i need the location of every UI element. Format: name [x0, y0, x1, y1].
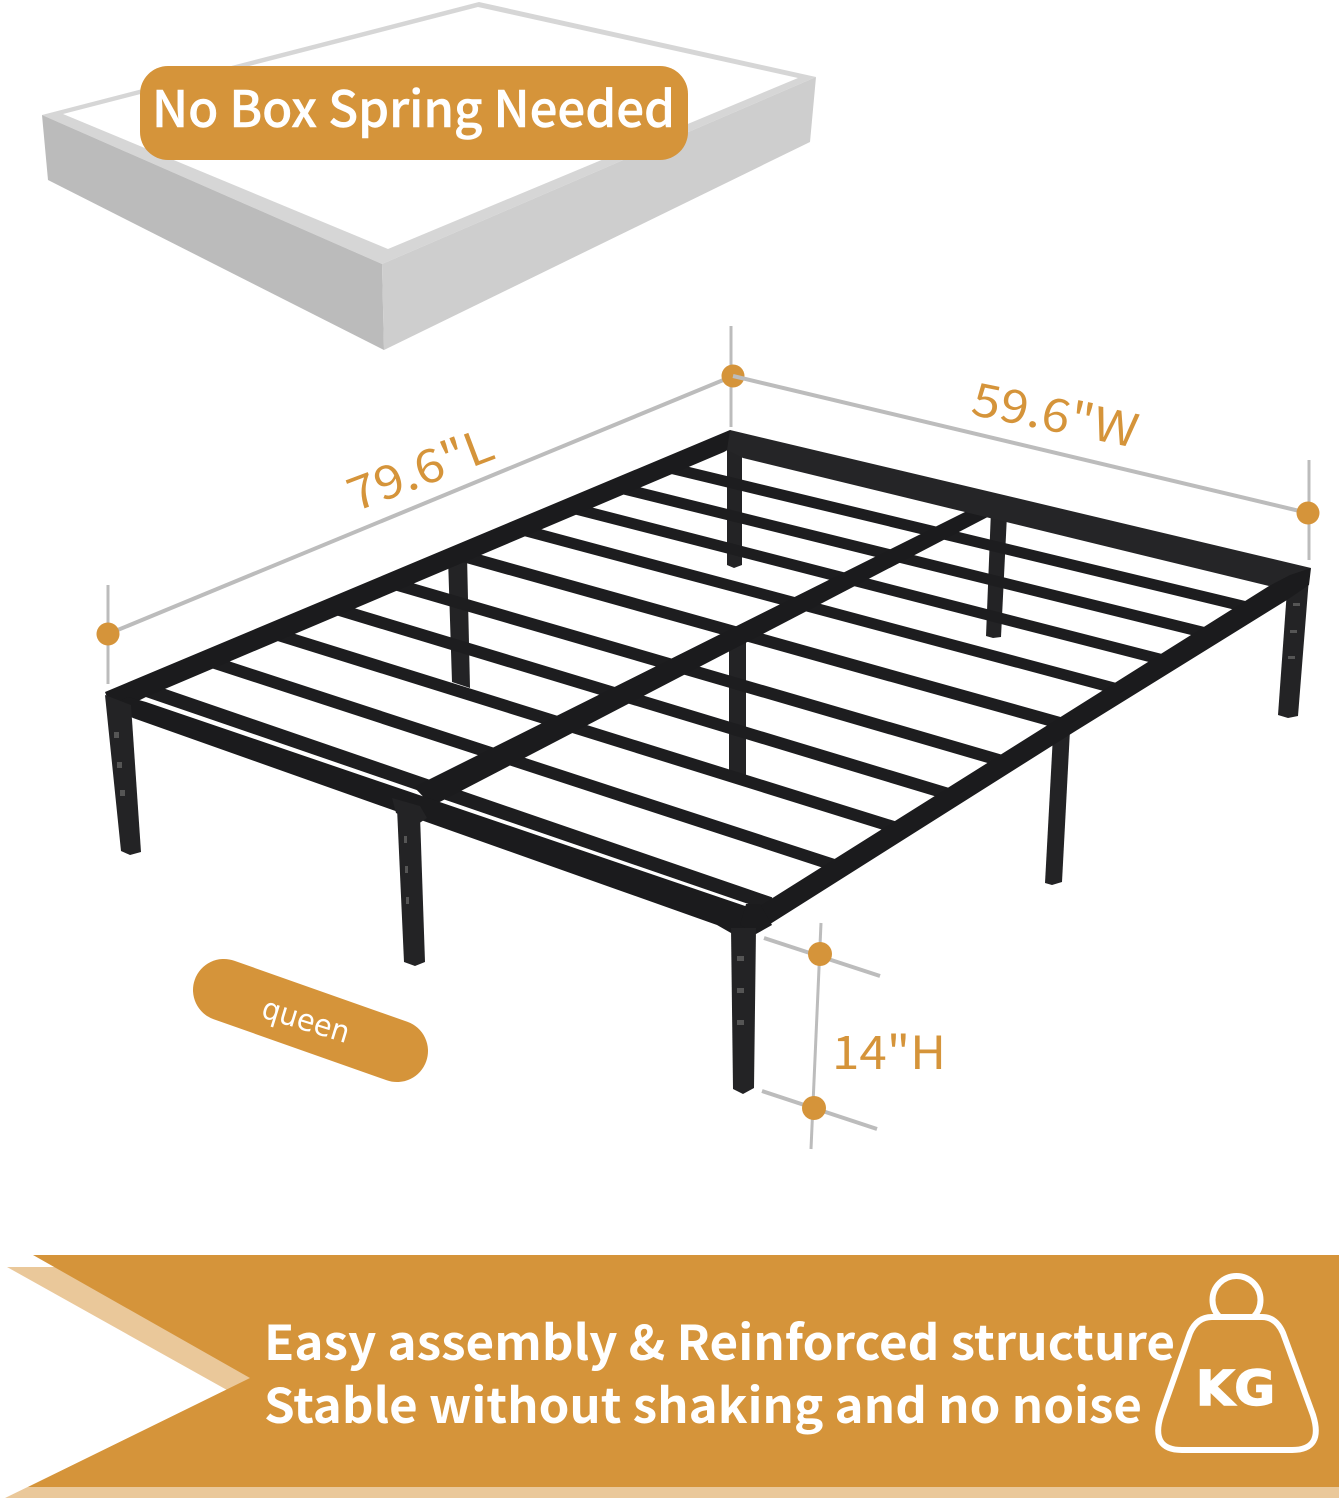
metal bed frame: [105, 430, 1311, 1094]
dimension: length 79.6 inches: [96, 326, 744, 684]
dimension: length 79.6 inches: 79.6"L: [336, 409, 502, 525]
box spring illustration: [42, 2, 816, 350]
banner text: Stable without shaking and no noise: [264, 1367, 1142, 1437]
side rail: back: [727, 430, 1311, 586]
front legs: [105, 695, 756, 1094]
side rail: right: [755, 568, 1311, 926]
banner text: [264, 1304, 1175, 1437]
bottom banner: [5, 1255, 1339, 1498]
label: queen: queen: [258, 991, 354, 1051]
slats: [144, 468, 1255, 904]
side rail: front: [110, 697, 767, 933]
leg holes: [114, 603, 1300, 1025]
dimension: width 59.6 inches: 59.6"W: [967, 363, 1145, 461]
banner text: Easy assembly & Reinforced structure: [264, 1304, 1175, 1374]
icon: KG weight: KG: [1196, 1361, 1275, 1417]
label: queen: [224, 990, 397, 1051]
label: no box spring needed: No Box Spring Needed: [152, 70, 675, 142]
dimension: height 14 inches: 14"H: [832, 1017, 946, 1083]
icon: KG weight: [1158, 1276, 1316, 1450]
dimension: width 59.6 inches: [733, 363, 1320, 560]
rear and inner legs: [448, 445, 1309, 885]
front corner joint: [740, 904, 772, 934]
side rail: left: [105, 430, 745, 706]
center beam: [414, 502, 1005, 806]
dimension: height 14 inches: [762, 923, 946, 1149]
